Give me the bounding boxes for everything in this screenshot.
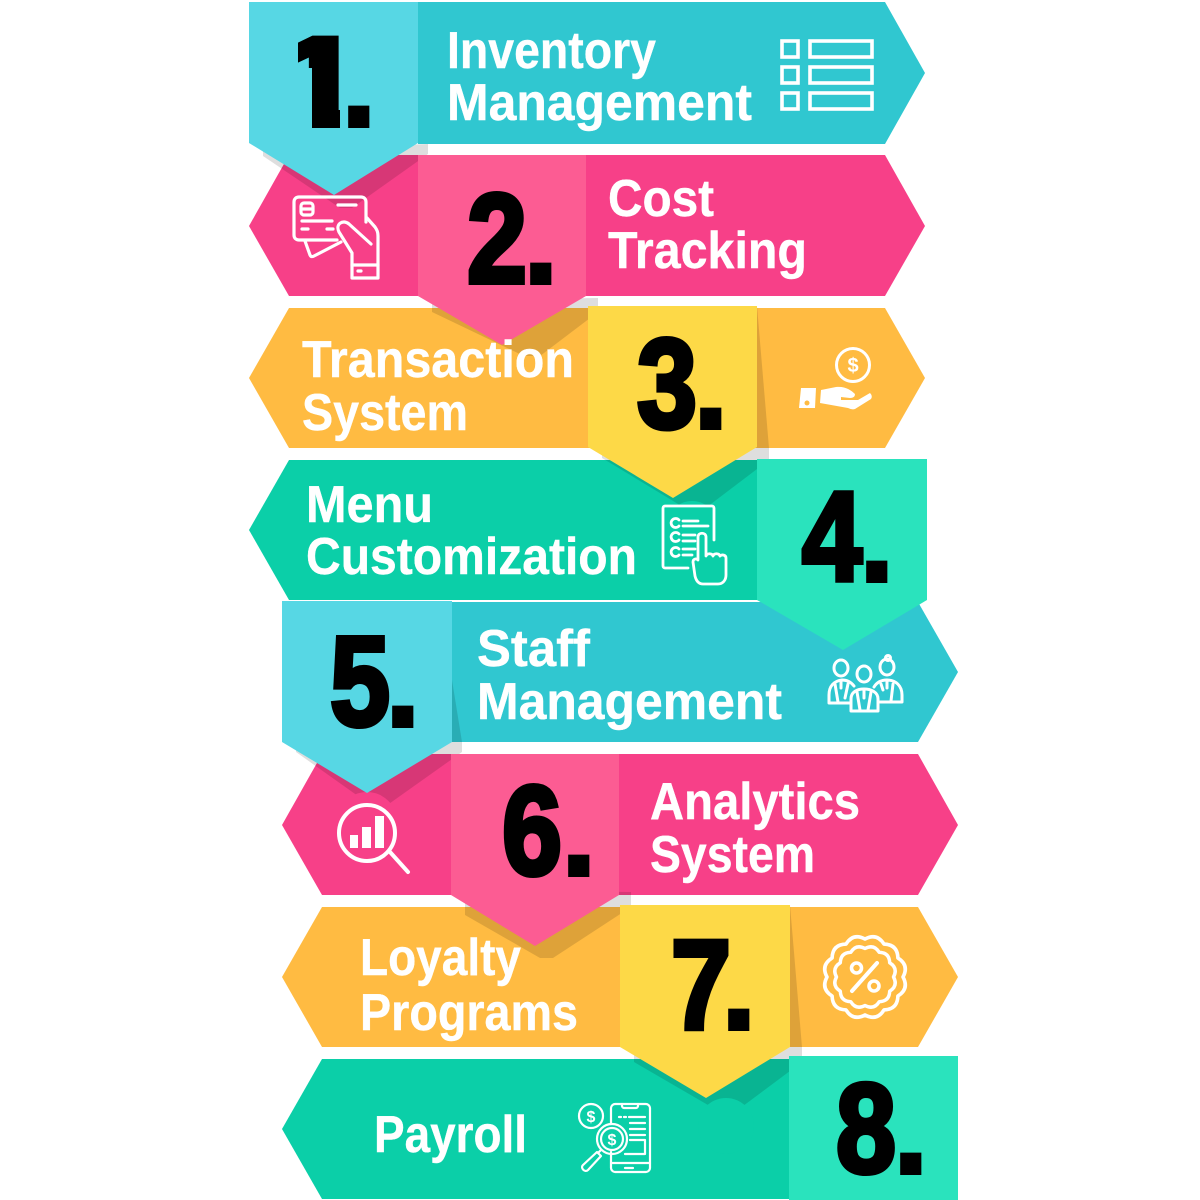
label: cost tracking bbox=[608, 170, 807, 280]
number tag 4 bbox=[757, 447, 927, 650]
band 1: inventory management bbox=[418, 2, 925, 144]
band 2: cost tracking bbox=[249, 155, 925, 296]
label: analytics system: Analytics bbox=[650, 773, 860, 831]
number tag 4: 4 bbox=[802, 465, 862, 607]
number tag 6: . bbox=[558, 741, 600, 909]
label: payroll: Payroll bbox=[374, 1106, 527, 1164]
band 6: analytics system bbox=[282, 754, 958, 895]
band 3: transaction system bbox=[249, 308, 925, 448]
label: analytics system bbox=[650, 773, 860, 884]
label: inventory management bbox=[447, 22, 752, 132]
label: staff management bbox=[477, 620, 782, 731]
icon: list bbox=[782, 41, 872, 109]
label: loyalty programs: Programs bbox=[360, 984, 578, 1042]
band 7: loyalty programs bbox=[282, 907, 958, 1047]
label: transaction system bbox=[302, 331, 574, 442]
infographic: eight numbered feature ribbons bbox=[249, 2, 958, 1200]
number tag 3: . bbox=[690, 294, 732, 462]
icon: phone payroll search: $ bbox=[608, 1132, 617, 1149]
label: transaction system: Transaction bbox=[302, 331, 574, 389]
band 8: payroll bbox=[282, 1059, 830, 1199]
number tag 8: 8 bbox=[836, 1057, 896, 1199]
label: menu customization bbox=[306, 476, 637, 586]
icon: staff team bbox=[829, 656, 902, 711]
label: loyalty programs bbox=[360, 929, 578, 1042]
number tag 6 bbox=[451, 741, 619, 946]
label: analytics system: System bbox=[650, 826, 815, 884]
icon: phone payroll search bbox=[579, 1104, 650, 1172]
label: inventory management: Inventory bbox=[447, 22, 656, 80]
number tag 4: . bbox=[856, 447, 898, 615]
number tag 5 bbox=[282, 592, 452, 793]
number tag 2: . bbox=[520, 149, 562, 317]
number tag 7: . bbox=[718, 895, 760, 1063]
number tag 5: . bbox=[382, 592, 424, 760]
icon: magnifier with bar chart bbox=[339, 805, 408, 872]
band 5: staff management bbox=[452, 602, 958, 742]
number tag 5: 5 bbox=[330, 610, 390, 752]
label: cost tracking: Cost bbox=[608, 170, 714, 228]
icon: phone payroll search: $ bbox=[587, 1109, 596, 1126]
number tag 3: 3 bbox=[637, 312, 697, 454]
label: cost tracking: Tracking bbox=[608, 222, 807, 280]
band 4: menu customization bbox=[249, 460, 800, 600]
icon: checklist with pointing hand bbox=[663, 506, 726, 584]
icon: hand receiving coin bbox=[799, 348, 872, 409]
tag shadows bbox=[263, 144, 802, 1112]
label: menu customization: Customization bbox=[306, 528, 637, 586]
number tag 7: 7 bbox=[671, 913, 731, 1055]
label: menu customization: Menu bbox=[306, 476, 433, 534]
number tag 6: 6 bbox=[502, 759, 562, 901]
label: loyalty programs: Loyalty bbox=[360, 929, 521, 987]
icon: percent badge bbox=[825, 937, 905, 1017]
number tag 2: 2 bbox=[467, 167, 527, 309]
icon: hand holding credit card bbox=[294, 197, 378, 278]
label: transaction system: System bbox=[302, 384, 468, 442]
label: staff management: Staff bbox=[477, 620, 591, 678]
number tag 3 bbox=[588, 294, 757, 498]
number tag 1 bbox=[249, 0, 418, 195]
number tag 8 bbox=[789, 1039, 958, 1200]
icon backing bumps bbox=[337, 501, 754, 1154]
number tag 7 bbox=[620, 895, 790, 1098]
number tag 1: 1 bbox=[273, 10, 366, 153]
number tag 2 bbox=[418, 149, 586, 345]
label: inventory management: Management bbox=[447, 74, 752, 132]
label: staff management: Management bbox=[477, 673, 782, 731]
icon: hand receiving coin: $ bbox=[847, 355, 859, 377]
